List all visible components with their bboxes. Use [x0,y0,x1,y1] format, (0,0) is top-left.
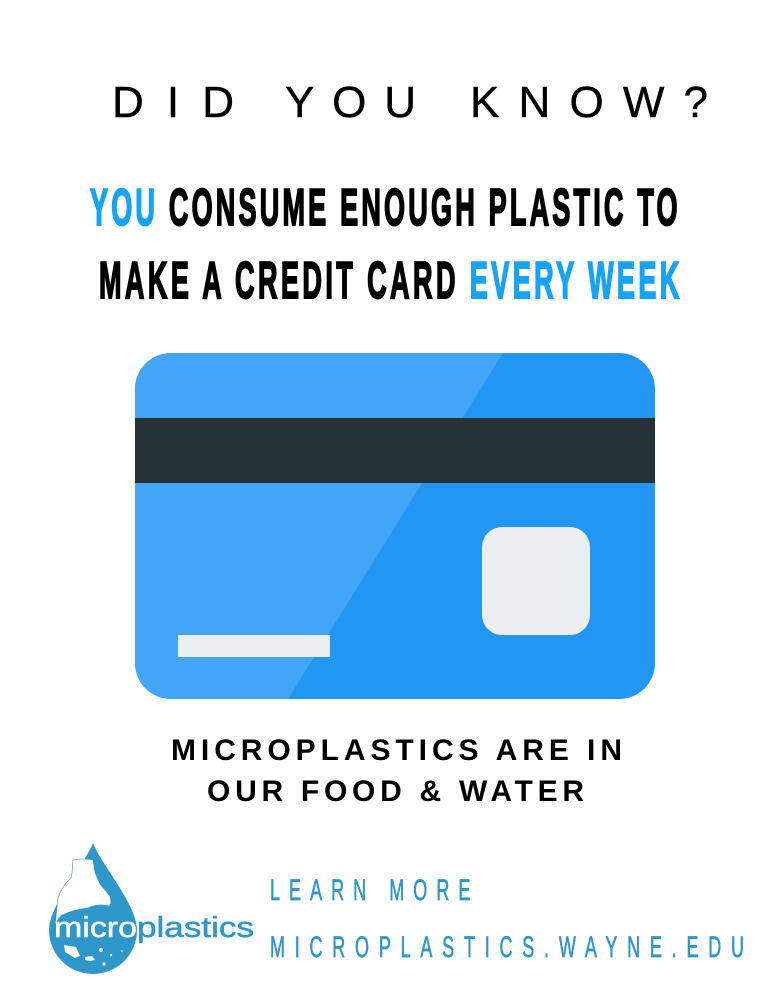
text block: microplastics statement [171,734,622,808]
website url: MICROPLASTICS.WAYNE.EDU [270,932,744,964]
link text: learn more and url [270,875,744,964]
title: did you know [112,78,708,127]
bottle in logo [55,859,111,926]
statement line 2: OUR FOOD & WATER [207,775,584,808]
heading: main message [90,177,679,309]
title: did you know: KNOW? [470,78,708,127]
card signature bar [178,635,330,657]
title: did you know: DID [112,78,234,127]
learn more: LEARN MORE [270,875,470,907]
statement line 1: MICROPLASTICS ARE IN [171,734,622,767]
card magnetic stripe [135,418,655,483]
heading line 1: YOU CONSUME ENOUGH PLASTIC TO [90,177,678,236]
title: did you know: YOU [285,78,416,127]
logo: microplastics drop [49,843,254,974]
logo: microplastics drop: plastics [137,912,254,944]
plastic fragments [64,945,123,966]
logo wordmark: micro [54,912,137,944]
card chip [482,527,590,635]
heading line 2: MAKE A CREDIT CARD EVERY WEEK [99,250,679,309]
icon: credit card [135,353,655,699]
